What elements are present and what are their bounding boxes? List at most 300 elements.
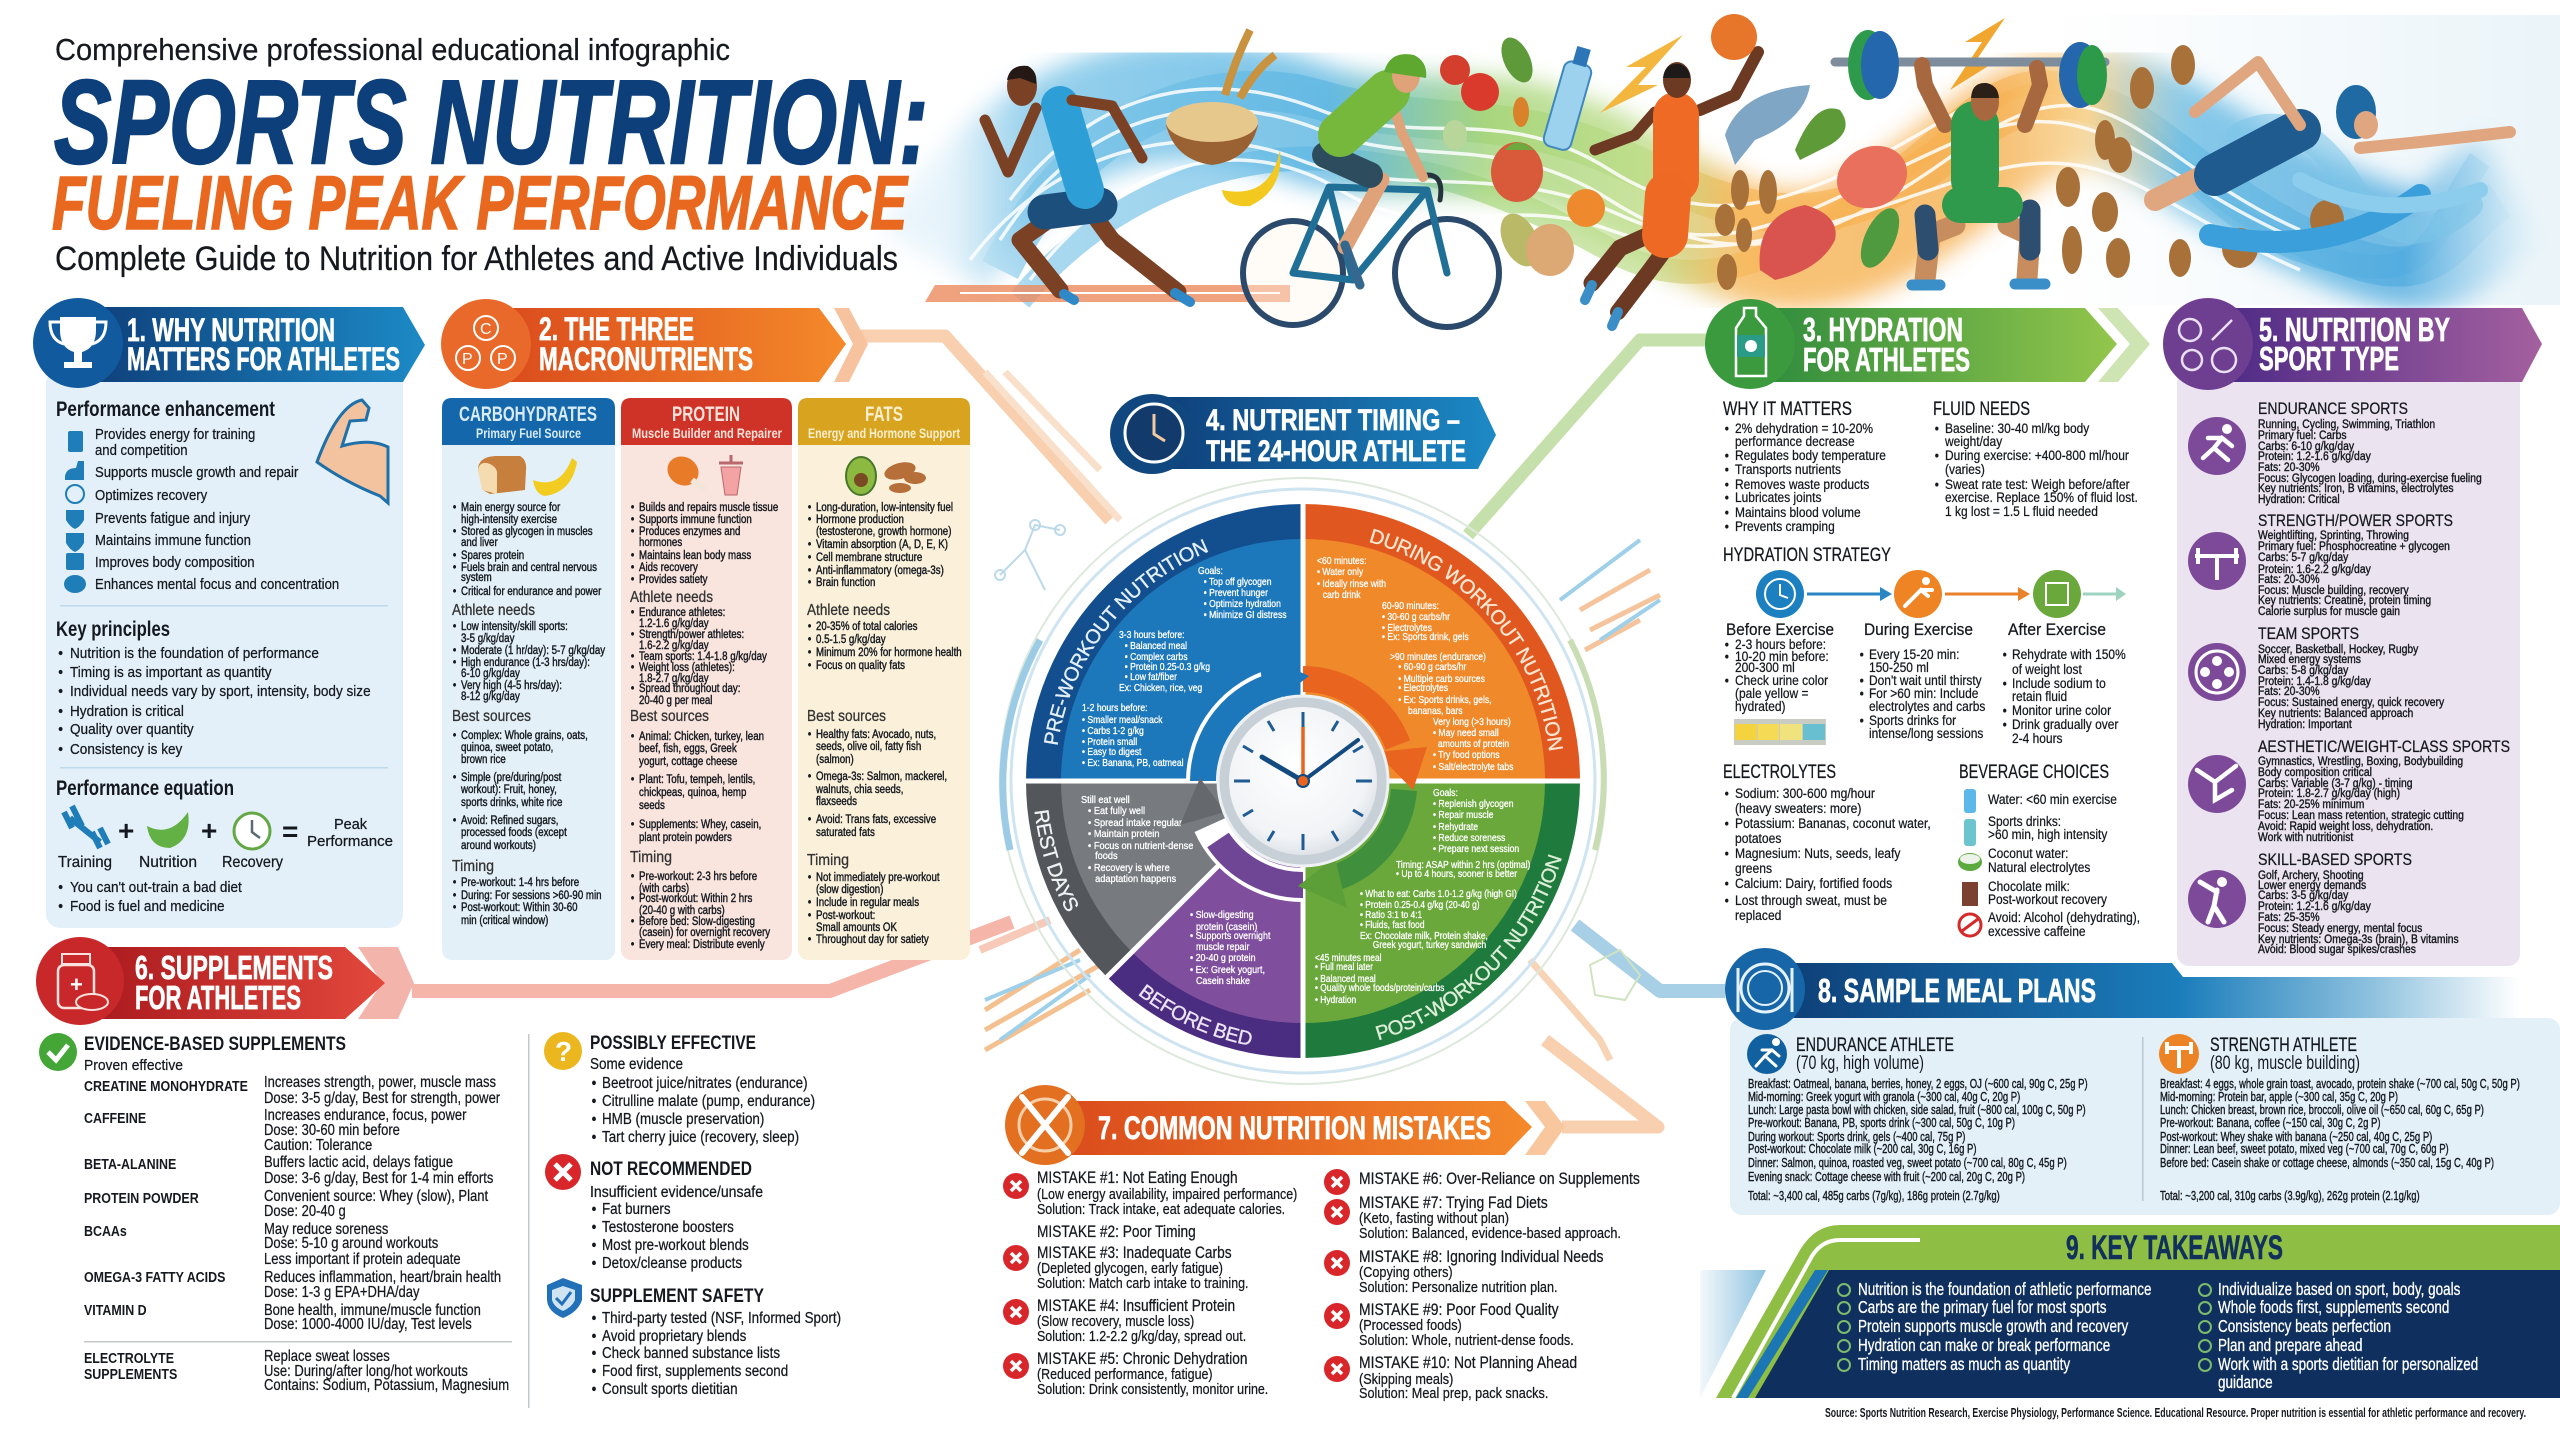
carbohydrates column: Primary Fuel Source [476,425,581,441]
endurance sports: ENDURANCE SPORTS [2258,399,2408,418]
carbohydrates column: • [453,501,456,514]
water bottle [1542,44,1598,152]
evidence-based supplements table: Convenient source: Whey (slow), Plant [264,1188,488,1205]
protein column: PROTEIN [672,403,740,426]
protein column: (20-40 g with carbs) [639,904,725,917]
fluid needs: (varies) [1945,461,1985,477]
after exercise: of weight lost [2012,661,2082,677]
endurance sports: Key nutrients: Iron, B vitamins, electrolytes [2258,483,2454,495]
after exercise: After Exercise [2008,620,2106,639]
protein column: Builds and repairs muscle tissue [639,501,778,514]
carbohydrates column: • [453,525,456,538]
rest-days text: • Eat fully well [1088,806,1145,817]
carbohydrates column: High endurance (1-3 hrs/day): [461,656,590,669]
electrolytes: Lost through sweat, must be [1735,892,1887,908]
takeaways column 2: Work with a sports dietitian for personalized [2218,1355,2478,1374]
pre-workout text: • Easy to digest [1082,746,1142,758]
key principles: • [58,741,63,758]
performance equation: • [58,898,63,915]
fats column: Brain function [816,576,875,589]
pre-workout text: Goals: [1198,565,1223,577]
carbohydrates column: Moderate (1 hr/day): 5-7 g/kg/day [461,644,606,657]
performance equation: + [118,815,134,846]
evidence-based supplements table: Increases strength, power, muscle mass [264,1074,496,1091]
fats column: • [808,871,811,884]
during-workout text: • 60-90 g carbs/hr [1398,661,1467,673]
curved segment labels [1034,528,1563,1045]
after exercise: Monitor urine color [2012,702,2112,718]
supplement safety [547,1278,841,1398]
section 8 banner [1725,948,2520,1030]
strength athlete plan: Before bed: Casein shake or cottage cheese, almonds (~350 cal, 15g C, 40g P) [2160,1157,2494,1170]
pre-workout text: • Complex carbs [1125,651,1188,663]
performance enhancement list: Supports muscle growth and repair [95,463,299,480]
carbohydrates column: around workouts) [461,839,536,852]
takeaways column 2: guidance [2218,1373,2273,1392]
mistakes column 1: Solution: Drink consistently, monitor urine. [1037,1381,1268,1397]
section 6 banner: + [70,972,83,997]
fats column: Post-workout: [816,909,875,922]
before-bed text: Casein shake [1196,975,1250,987]
performance enhancement list: Maintains immune function [95,531,251,548]
fats column: Include in regular meals [816,896,920,909]
carbohydrates column: sports drinks, white rice [461,796,562,809]
evidence-based supplements table: Dose: 30-60 min before [264,1122,400,1139]
strength athlete plan: Dinner: Lean beef, sweet potato, mixed veg (~700 cal, 70g C, 60g P) [2160,1143,2449,1156]
after exercise: 2-4 hours [2012,730,2063,746]
key principles: Individual needs vary by sport, intensity, body size [70,683,371,700]
fats column: 0.5-1.5 g/kg/day [816,633,886,646]
post-workout text: • Replenish glycogen [1433,798,1513,810]
why it matters: Prevents cramping [1735,518,1835,534]
mistakes column 2: MISTAKE #10: Not Planning Ahead [1359,1354,1577,1372]
evidence-based supplements table: Less important if protein adequate [264,1251,461,1268]
curved segment labels: DURING WORKOUT NUTRITION [1370,528,1563,750]
section 6 banner: 6. SUPPLEMENTS [135,949,333,986]
circular arrows around the clock [1203,679,1404,885]
during exercise: Every 15-20 min: [1869,646,1959,662]
why it matters: • [1725,461,1729,477]
protein column: Weight loss (athletes): [639,661,735,674]
skill-based sports: Carbs: 3-5 g/kg/day [2258,890,2349,902]
key principles: Timing is as important as quantity [70,664,272,681]
performance enhancement list: Performance enhancement [56,398,275,421]
aesthetic weight-class sports: Carbs: Variable (3-7 g/kg) - timing [2258,778,2413,790]
performance enhancement list [56,398,339,592]
during-workout text: carb drink [1323,589,1361,601]
skill-based sports: Golf, Archery, Shooting [2258,870,2364,882]
protein column: • [631,513,634,526]
why it matters: Transports nutrients [1735,461,1841,477]
mistakes column 2: (Keto, fasting without plan) [1359,1209,1509,1226]
not recommended: NOT RECOMMENDED [590,1159,752,1180]
hydration strategy timeline: HYDRATION STRATEGY [1723,545,1891,566]
beverage choices: Chocolate milk: [1988,878,2070,894]
fats column: Small amounts OK [816,921,898,934]
key principles: Key principles [56,618,170,641]
post-workout text: • Full meal later [1315,961,1373,973]
not recommended: Testosterone boosters [602,1219,734,1236]
during exercise: • [1860,685,1864,701]
before-bed text: • Slow-digesting [1190,909,1254,921]
possibly effective: • [592,1093,596,1110]
during-workout text: 60-90 minutes: [1382,600,1439,612]
strength athlete plan [2159,1034,2520,1203]
carbohydrates column: Low intensity/skill sports: [461,620,568,633]
protein column: Endurance athletes: [639,606,725,619]
strength athlete plan: Mid-morning: Protein bar, apple (~300 cal, 35g C, 20g P) [2160,1091,2398,1104]
beverage choices: BEVERAGE CHOICES [1959,762,2109,783]
performance equation: Performance equation [56,777,234,800]
post-workout text: • Hydration [1315,994,1356,1006]
during exercise: Sports drinks for [1869,712,1957,728]
post-workout text: • Balanced meal [1315,973,1376,985]
carbohydrates column: Best sources [452,708,531,725]
before exercise: (pale yellow = [1735,685,1808,701]
after exercise: • [2003,702,2007,718]
evidence-based supplements table: Buffers lactic acid, delays fatigue [264,1154,453,1171]
performance equation: = [282,816,298,847]
before exercise: 2-3 hours before: [1735,636,1826,652]
carbohydrates column: • [453,620,456,633]
panel: 5 nutrition by sport type [2163,298,2542,966]
beverage choices: Water: <60 min exercise [1988,791,2117,807]
takeaways column 2: Consistency beats perfection [2218,1317,2391,1336]
section 2 banner: 2. THE THREE [539,311,694,347]
carbohydrates column: Fuels brain and central nervous [461,561,597,574]
mistakes column 1: MISTAKE #1: Not Eating Enough [1037,1169,1238,1187]
curved segment labels: BEFORE BED [1138,984,1252,1045]
fluid needs: Sweat rate test: Weigh before/after [1945,476,2130,492]
fats column: • [808,501,811,514]
carbohydrates column: Stored as glycogen in muscles [461,525,593,538]
during-workout text: • Electrolytes [1382,622,1432,634]
protein column [621,398,792,960]
protein column: Supports immune function [639,513,752,526]
section 5 banner: 5. NUTRITION BY [2259,311,2450,348]
carbohydrates column: processed foods (except [461,826,567,839]
electrolytes: (heavy sweaters: more) [1735,800,1861,816]
performance equation: Training [58,854,112,871]
performance enhancement list: and competition [95,441,188,458]
carbohydrates column: Main energy source for [461,501,561,514]
mistakes column 2: MISTAKE #8: Ignoring Individual Needs [1359,1248,1604,1266]
post-workout text: • Rehydrate [1433,821,1478,833]
electrolytes: • [1725,845,1729,861]
why it matters: • [1725,476,1729,492]
clock [1218,696,1388,866]
rest-days text [1081,795,1194,885]
endurance sports: Protein: 1.2-1.6 g/kg/day [2258,451,2371,463]
section 3 banner: 3. HYDRATION [1803,311,1963,348]
key principles: Nutrition is the foundation of performance [70,645,319,662]
strength athlete plan: (80 kg, muscle building) [2210,1053,2360,1074]
evidence-based supplements table: Dose: 3-6 g/day, Best for 1-4 min efforts [264,1170,493,1187]
carbohydrates column: During: For sessions >60-90 min [461,889,602,902]
evidence-based supplements table: SUPPLEMENTS [84,1366,177,1382]
performance enhancement list: Provides energy for training [95,425,255,442]
fluid needs: • [1935,420,1939,436]
fats column: • [808,659,811,672]
mistakes column 2: Solution: Whole, nutrient-dense foods. [1359,1331,1574,1348]
pre-workout text: • Optimize hydration [1204,598,1281,610]
protein column: • [631,818,634,831]
protein column: plant protein powders [639,831,732,844]
electrolytes: greens [1735,860,1772,876]
aesthetic weight-class sports: Gymnastics, Wrestling, Boxing, Bodybuilding [2258,756,2463,768]
pre-workout text: • Protein 0.25-0.3 g/kg [1125,661,1210,673]
pre-workout text: • Low fat/fiber [1125,671,1178,683]
supplement safety: • [592,1381,596,1398]
fats column: flaxseeds [816,795,857,808]
quadrant sectors [1026,504,1303,781]
strength power sports: Protein: 1.6-2.2 g/kg/day [2258,564,2371,576]
performance equation: Peak [334,816,367,833]
key principles: Hydration is critical [70,703,184,720]
rest-days text: adaptation happens [1095,874,1176,885]
endurance athlete plan: During workout: Sports drink, gels (~400 cal, 75g P) [1748,1131,1966,1144]
protein column: Timing [630,849,672,866]
carbohydrates column: • [453,889,456,902]
fluid needs: 1 kg lost = 1.5 L fluid needed [1945,503,2098,519]
before-bed text: • 20-40 g protein [1190,952,1256,964]
section 2 banner [441,299,868,389]
electrolytes: replaced [1735,907,1781,923]
protein column: Pre-workout: 2-3 hrs before [639,870,757,883]
aesthetic weight-class sports: Work with nutritionist [2258,832,2353,844]
carbohydrates column: Athlete needs [452,602,535,619]
fats column: Healthy fats: Avocado, nuts, [816,728,936,741]
fats column: • [808,513,811,526]
panel: 1 why nutrition matters [33,298,425,928]
evidence-based supplements table: OMEGA-3 FATTY ACIDS [84,1269,225,1285]
beverage choices: Sports drinks: [1988,813,2061,829]
icon: bread and banana [478,456,577,496]
performance enhancement list: Enhances mental focus and concentration [95,575,339,592]
possibly effective: • [592,1129,596,1146]
after exercise: • [2003,716,2007,732]
strength power sports: Carbs: 5-7 g/kg/day [2258,552,2349,564]
carbohydrates column: Post-workout: Within 30-60 [461,901,578,914]
carbohydrates column: • [453,679,456,692]
evidence-based supplements table: Replace sweat losses [264,1348,390,1365]
mistakes column 1: (Depleted glycogen, early fatigue) [1037,1260,1223,1276]
mistakes column 1: (Reduced performance, fatigue) [1037,1366,1213,1382]
why it matters: • [1725,447,1729,463]
not recommended [545,1154,763,1272]
fats column: Vitamin absorption (A, D, E, K) [816,538,948,551]
aesthetic weight-class sports: Focus: Lean mass retention, strategic cutting [2258,810,2464,822]
post-workout text [1315,787,1530,1006]
evidence-based supplements table: PROTEIN POWDER [84,1190,199,1206]
possibly effective: • [592,1111,596,1128]
during exercise: electrolytes and carbs [1869,698,1986,714]
carbohydrates column: • [453,771,456,784]
rest-days text: Still eat well [1081,795,1130,806]
fats column: Not immediately pre-workout [816,871,940,884]
evidence-based supplements table: Dose: 1000-4000 IU/day, Test levels [264,1316,472,1333]
strength athlete plan: Breakfast: 4 eggs, whole grain toast, avocado, protein shake (~700 cal, 50g C, 50g P) [2160,1078,2520,1091]
electrolytes: potatoes [1735,830,1782,846]
endurance athlete plan: Pre-workout: Banana, PB, sports drink (~300 cal, 50g C, 10g P) [1748,1117,2015,1130]
evidence-based supplements table: Increases endurance, focus, power [264,1107,467,1124]
fluid needs: • [1935,476,1939,492]
section 8 banner: 8. SAMPLE MEAL PLANS [1818,972,2096,1009]
post-workout text: • Protein 0.25-0.4 g/kg (20-40 g) [1360,899,1480,911]
fats column: • [808,770,811,783]
section 1 banner: MATTERS FOR ATHLETES [127,341,400,377]
before exercise: Before Exercise [1726,620,1834,639]
pre-workout text: • Carbs 1-2 g/kg [1082,725,1144,737]
carbohydrates column: • [453,585,456,598]
evidence-based supplements table: Dose: 5-10 g around workouts [264,1235,438,1252]
not recommended: Fat burners [602,1201,671,1218]
supplement safety: Third-party tested (NSF, Informed Sport) [602,1310,841,1327]
mistakes column 2: Solution: Meal prep, pack snacks. [1359,1384,1548,1401]
team sports: Hydration: Important [2258,719,2352,731]
carbohydrates column: quinoa, sweet potato, [461,741,553,754]
protein column: • [631,573,634,586]
takeaways column 1: Carbs are the primary fuel for most sports [1858,1298,2107,1317]
title block [52,32,928,278]
fats column: walnuts, chia seeds, [815,783,903,796]
protein column: Provides satiety [639,573,708,586]
takeaways column 1: Hydration can make or break performance [1858,1336,2110,1355]
key principles [56,618,371,758]
after exercise: • [2003,675,2007,691]
connector bands between sections [412,336,1725,1127]
protein column: (casein) for overnight recovery [639,926,771,939]
skill-based sports: Avoid: Blood sugar spikes/crashes [2258,944,2416,956]
fats column: • [808,646,811,659]
protein column: Best sources [630,708,709,725]
electrolytes: • [1725,785,1729,801]
fluid needs: weight/day [1944,433,2003,449]
protein column: • [631,561,634,574]
takeaways column 2: Whole foods first, supplements second [2218,1298,2449,1317]
performance enhancement list: Improves body composition [95,553,255,570]
rest-days text: • Maintain protein [1088,829,1159,840]
fluid needs: During exercise: +400-800 ml/hour [1945,447,2129,463]
fluid needs: Baseline: 30-40 ml/kg body [1945,420,2090,436]
during-workout text: bananas, bars [1408,705,1463,717]
during exercise: For >60 min: Include [1869,685,1978,701]
outer halo rings [1000,478,1606,1084]
mistakes column 2: (Processed foods) [1359,1316,1462,1333]
fats column: • [808,620,811,633]
protein column: Plant: Tofu, tempeh, lentils, [639,773,755,786]
fats column: Long-duration, low-intensity fuel [816,501,953,514]
during-workout text: • Ex: Sports drink, gels [1382,631,1469,643]
strength athlete plan: STRENGTH ATHLETE [2210,1035,2357,1056]
supplement safety: • [592,1363,596,1380]
during exercise: During Exercise [1864,620,1973,639]
possibly effective: • [592,1075,596,1092]
endurance athlete plan: ENDURANCE ATHLETE [1796,1035,1954,1056]
evidence-based supplements table: Bone health, immune/muscle function [264,1302,481,1319]
possibly effective: Tart cherry juice (recovery, sleep) [602,1129,799,1146]
skill-based sports: Fats: 25-35% [2258,912,2320,924]
skill-based sports: Lower energy demands [2258,880,2367,892]
fish, broccoli, salmon, steak, leaf [1725,85,1810,165]
carbohydrates column: Critical for endurance and power [461,585,602,598]
beverage choices [1958,762,2140,939]
section 4 banner: nutrient timing: THE 24-HOUR ATHLETE [1206,435,1466,468]
protein column: beef, fish, eggs, Greek [639,742,737,755]
performance equation: + [201,815,217,846]
supplement safety: • [592,1345,596,1362]
takeaways column 2: Plan and prepare ahead [2218,1336,2363,1355]
endurance sports: Hydration: Critical [2258,494,2340,506]
team sports: Key nutrients: Balanced approach [2258,708,2413,720]
evidence-based supplements table: Caution: Tolerance [264,1137,372,1154]
fats column: Focus on quality fats [816,659,906,672]
main title: SPORTS NUTRITION: [54,56,928,189]
secondary title: FUELING PEAK PERFORMANCE [52,161,909,246]
post-workout text: • What to eat: Carbs 1.0-1.2 g/kg (high GI) [1360,888,1517,900]
evidence-based supplements table: May reduce soreness [264,1221,388,1238]
team sports: Protein: 1.4-1.8 g/kg/day [2258,676,2371,688]
not recommended: Most pre-workout blends [602,1237,749,1254]
protein column: • [631,773,634,786]
before-bed text: • Supports overnight [1190,930,1271,942]
fats column: • [808,538,811,551]
why it matters: WHY IT MATTERS [1723,399,1852,420]
strength athlete plan: Post-workout: Whey shake with banana (~250 cal, 40g C, 25g P) [2160,1131,2432,1144]
swimmer [2155,62,2510,242]
pre-workout text: • Balanced meal [1125,640,1187,652]
electrolytes: • [1725,892,1729,908]
evidence-based supplements table: Dose: 3-5 g/day, Best for strength, power [264,1090,500,1107]
pre-workout text: Ex: Chicken, rice, veg [1119,682,1202,694]
fats column: (testosterone, growth hormone) [816,525,951,538]
post-workout text: • Up to 4 hours, sooner is better [1396,868,1518,880]
during exercise: 150-250 ml [1869,659,1929,675]
why it matters [1723,399,1886,534]
strength power sports: Primary fuel: Phosphocreatine + glycogen [2258,541,2450,553]
after exercise: Rehydrate with 150% [2012,646,2126,662]
skill-based sports: SKILL-BASED SPORTS [2258,850,2412,869]
fats column: • [808,933,811,946]
before-bed text: muscle repair [1196,941,1250,953]
during-workout text: • Try food options [1433,749,1500,761]
before exercise: • [1725,648,1729,664]
carbohydrates column: • [453,876,456,889]
strength power sports [2188,511,2453,618]
protein column: seeds [639,799,665,812]
post-workout text: Timing: ASAP within 2 hrs (optimal) [1396,859,1530,871]
during exercise: intense/long sessions [1869,725,1984,741]
possibly effective [544,1032,815,1146]
possibly effective: ? [555,1036,572,1067]
mistakes column 2: Solution: Personalize nutrition plan. [1359,1278,1558,1295]
evidence-based supplements table: Contains: Sodium, Potassium, Magnesium [264,1377,509,1394]
carbohydrates column: 6-10 g/kg/day [461,667,520,680]
why it matters: • [1725,420,1729,436]
beverage choices: Avoid: Alcohol (dehydrating), [1988,909,2140,925]
fats column [798,398,970,960]
fats column: Energy and Hormone Support [808,425,960,441]
section 2 banner: P [462,351,473,368]
colour wave [935,82,2510,300]
evidence-based supplements table: ELECTROLYTE [84,1350,174,1366]
endurance sports: Carbs: 6-10 g/kg/day [2258,441,2355,453]
decorative molecules [995,520,1640,1000]
during-workout text: • Ex: Sports drinks, gels, [1398,694,1492,706]
rest-days text: • Focus on nutrient-dense [1088,841,1194,852]
post-workout text: <45 minutes meal [1315,952,1381,964]
supplement safety: Food first, supplements second [602,1363,788,1380]
